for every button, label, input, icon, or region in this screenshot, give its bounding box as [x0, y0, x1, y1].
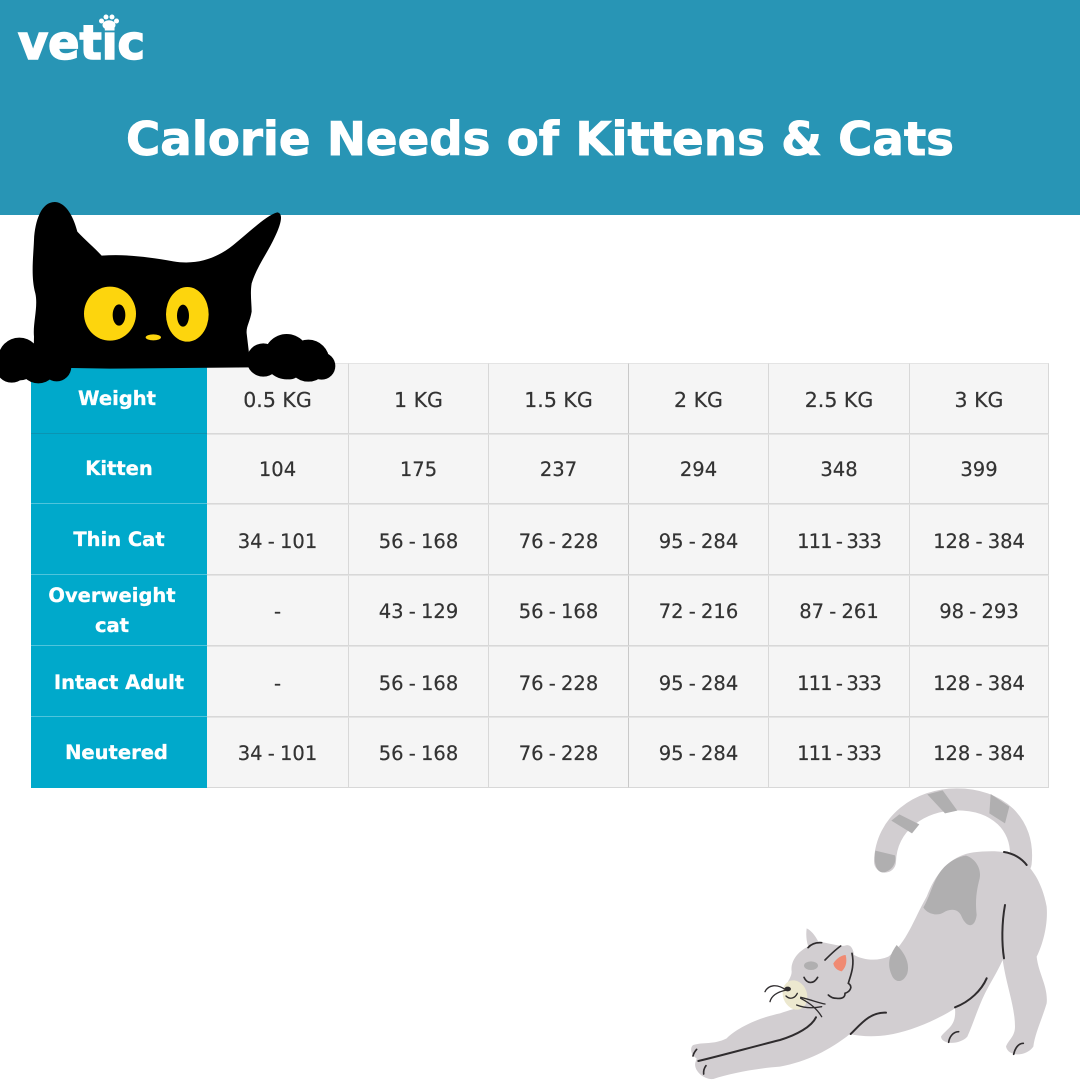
muzzle [779, 977, 811, 1013]
line details [693, 852, 1027, 1074]
row: Overweight cat: 43 - 129 [379, 600, 458, 623]
row: Weight: 2.5 KG [805, 388, 873, 412]
right paw [247, 334, 335, 382]
header banner [0, 0, 1080, 215]
row: Intact Adult: Intact Adult [54, 670, 184, 694]
row: Intact Adult [31, 646, 1049, 717]
row: Intact Adult: 56 - 168 [379, 672, 458, 695]
ear [833, 955, 846, 971]
icon: eyes [84, 287, 209, 342]
row: Neutered: Neutered [65, 741, 168, 764]
row: Thin Cat: 128 - 384 [933, 530, 1025, 553]
title: Calorie Needs of Kittens & Cats [126, 113, 954, 167]
row: Weight: 2 KG [674, 388, 723, 412]
row: Thin Cat: 95 - 284 [659, 530, 738, 553]
row: Overweight cat: 87 - 261 [799, 600, 879, 623]
row: Overweight cat: 72 - 216 [659, 600, 738, 623]
row: Overweight cat: Overweight [48, 584, 176, 607]
row: Intact Adult: 76 - 228 [519, 672, 598, 695]
row: Thin Cat: 76 - 228 [519, 530, 598, 553]
row: Intact Adult: 111 - 333 [797, 672, 881, 695]
row: Neutered: 111 - 333 [797, 742, 881, 764]
row: Neutered: 95 - 284 [659, 742, 738, 764]
row: Weight: 0.5 KG [243, 388, 312, 412]
row: Kitten: 294 [680, 458, 717, 480]
row: Neutered: 34 - 101 [238, 742, 317, 764]
row: Overweight cat: cat [95, 614, 129, 637]
icon: paw [99, 14, 119, 30]
left paw [0, 338, 71, 383]
table [31, 363, 1049, 788]
logo: vetic: vetic [18, 16, 145, 71]
row: Weight [31, 363, 1049, 434]
row: Kitten: Kitten [85, 456, 153, 480]
row: Overweight cat [31, 575, 1049, 646]
row: Intact Adult: - [274, 672, 281, 695]
row: Kitten: 104 [259, 458, 296, 480]
row: Weight: Weight [78, 387, 156, 410]
tail [885, 799, 1021, 863]
row: Intact Adult: 95 - 284 [659, 672, 738, 695]
row: Weight: 1 KG [394, 388, 443, 412]
row: Thin Cat: 56 - 168 [379, 530, 458, 553]
row: Overweight cat: - [274, 600, 281, 623]
row: Neutered: 76 - 228 [519, 742, 598, 764]
row: Thin Cat: 111 - 333 [797, 530, 881, 553]
row: Neutered: 56 - 168 [379, 742, 458, 764]
row: Overweight cat: 98 - 293 [939, 600, 1019, 623]
row: Kitten: 175 [400, 458, 437, 480]
body [691, 851, 1047, 1079]
row: Kitten [31, 434, 1049, 504]
row: Intact Adult: 128 - 384 [933, 672, 1025, 695]
row: Weight: 3 KG [955, 388, 1003, 412]
row: Neutered [31, 717, 1049, 788]
row: Thin Cat: Thin Cat [73, 528, 165, 551]
row: Kitten: 348 [820, 458, 858, 480]
row: Neutered: 128 - 384 [933, 742, 1025, 764]
patches [923, 856, 980, 925]
row: Kitten: 237 [540, 458, 577, 480]
row: Kitten: 399 [960, 458, 998, 480]
row: Weight: 1.5 KG [524, 388, 593, 412]
row: Thin Cat: 34 - 101 [238, 530, 317, 553]
row: Overweight cat: 56 - 168 [519, 600, 598, 623]
row: Thin Cat [31, 504, 1049, 575]
